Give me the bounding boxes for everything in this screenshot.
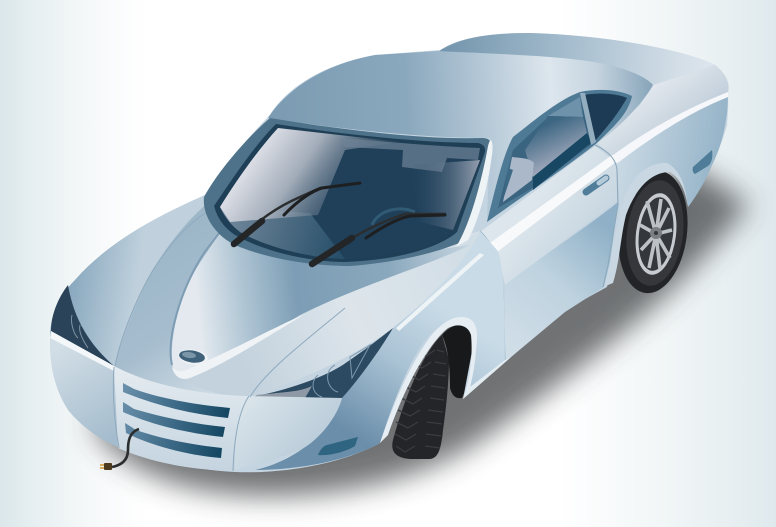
left bumper bbox=[50, 338, 118, 447]
rear side marker bbox=[693, 150, 712, 174]
spokes bbox=[640, 199, 672, 269]
rim bbox=[631, 191, 681, 277]
door lower bbox=[505, 202, 618, 362]
panel seams bbox=[113, 213, 345, 471]
upper-left reflection bbox=[220, 128, 400, 222]
door cut lines bbox=[480, 145, 618, 362]
windshield frame bbox=[204, 118, 491, 266]
ground shadow bbox=[90, 165, 750, 496]
hood scoop bbox=[172, 225, 470, 379]
seat bbox=[503, 157, 534, 202]
rear quarter panel bbox=[613, 93, 728, 207]
tread pattern bbox=[395, 350, 446, 452]
left headlight bbox=[51, 285, 114, 366]
glass lower-left band bbox=[220, 207, 345, 259]
steering wheel bbox=[372, 209, 415, 225]
door upper bbox=[480, 146, 618, 285]
front tire bbox=[392, 335, 449, 459]
interior bbox=[525, 116, 587, 177]
roof bbox=[268, 51, 653, 222]
side window bbox=[487, 90, 632, 222]
glass right reflection bbox=[410, 160, 480, 230]
pillar bbox=[580, 93, 596, 145]
right headlight bbox=[251, 328, 393, 399]
rear wheel bbox=[612, 167, 694, 297]
white shoulder stripe bbox=[480, 92, 728, 252]
windshield white trim bbox=[456, 140, 493, 247]
sill bbox=[463, 358, 510, 399]
power cord and plug bbox=[100, 429, 139, 470]
fender top bbox=[183, 231, 480, 397]
front glass bbox=[498, 98, 593, 208]
right bumper bbox=[235, 396, 342, 470]
tire bbox=[612, 167, 694, 297]
right wiper bbox=[311, 214, 446, 264]
rear deck bbox=[438, 33, 715, 85]
door handle bbox=[586, 178, 606, 192]
scoop bright edge bbox=[172, 314, 305, 379]
bumper marker bbox=[318, 437, 358, 455]
wheel well bbox=[442, 325, 474, 398]
rear window bbox=[585, 94, 627, 143]
hood badge bbox=[177, 347, 209, 367]
front grille panel bbox=[114, 366, 248, 471]
left wiper bbox=[233, 183, 361, 244]
rear shoulder bbox=[597, 65, 729, 157]
left fender bbox=[50, 190, 225, 368]
fender white streak bbox=[396, 253, 484, 331]
front arch lip bbox=[380, 317, 477, 443]
dashboard glare bbox=[340, 138, 480, 172]
windshield inner dark edge bbox=[214, 124, 485, 262]
right fender bbox=[255, 231, 505, 470]
body: base shape bbox=[50, 33, 728, 472]
windshield glass bbox=[220, 128, 480, 259]
rear arch lip bbox=[603, 163, 688, 287]
hood centre bbox=[114, 190, 480, 397]
grille slots bbox=[123, 383, 230, 458]
